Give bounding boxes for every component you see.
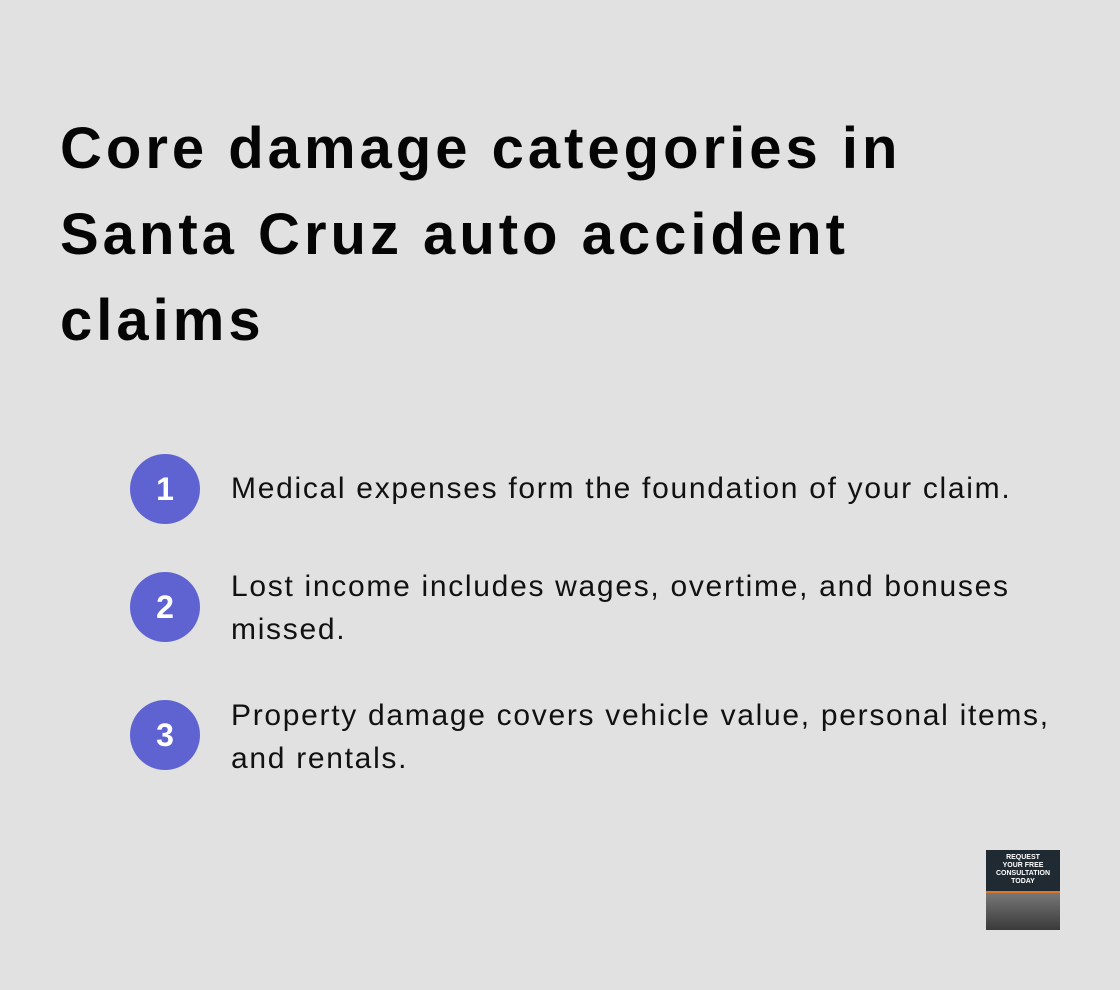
text 3: and rentals. (231, 742, 408, 775)
badge 3: 3 (156, 717, 174, 753)
text 2: Lost income includes wages, overtime, and bonuses (231, 570, 1010, 603)
text 3 (231, 699, 1050, 775)
text 3: Property damage covers vehicle value, personal items, (231, 699, 1050, 732)
text 2: missed. (231, 613, 346, 646)
text 1: Medical expenses form the foundation of your claim. (231, 472, 1011, 505)
badge 2: 2 (156, 589, 174, 625)
text 2 (231, 570, 1010, 646)
title: Core damage categories in (60, 116, 901, 181)
badge 3 (130, 700, 200, 770)
badge 1 (130, 454, 200, 524)
logo: consultation badge: TODAY (1011, 878, 1035, 885)
badge 2 (130, 572, 200, 642)
logo: consultation badge: REQUEST (1006, 854, 1040, 861)
title: claims (60, 288, 265, 353)
title (60, 116, 901, 353)
logo: consultation badge: YOUR FREE (1003, 862, 1043, 869)
logo: consultation badge: CONSULTATION (996, 870, 1050, 877)
badge 1: 1 (156, 471, 174, 507)
logo: consultation badge (986, 850, 1060, 930)
title: Santa Cruz auto accident (60, 202, 849, 267)
